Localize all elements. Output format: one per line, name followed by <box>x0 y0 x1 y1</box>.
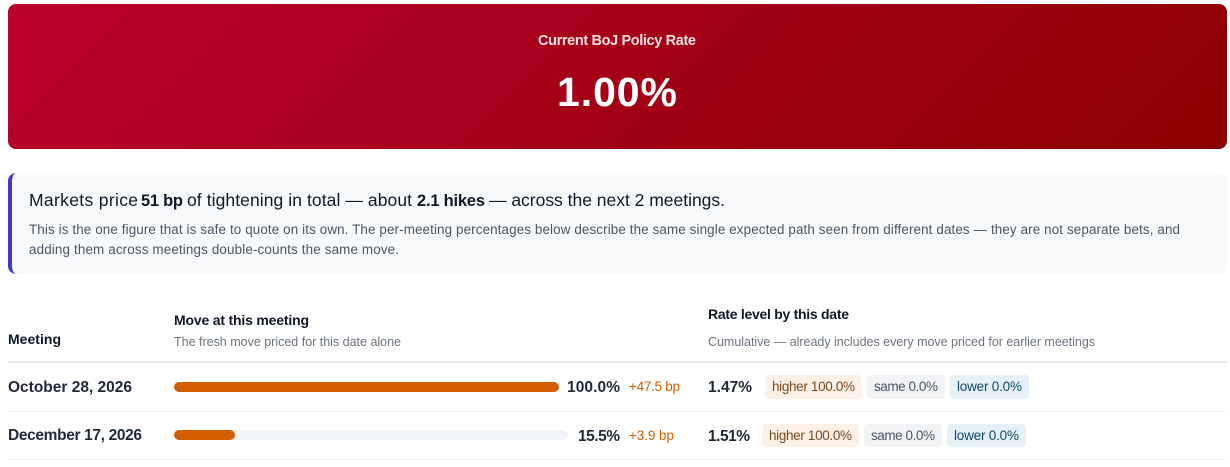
move probability: 15.5% <box>578 428 620 445</box>
callout headline: Markets price <box>29 190 138 210</box>
pill: lower <box>950 375 1029 399</box>
table row: October 28, 2026 <box>8 375 1029 399</box>
callout headline: of tightening in total — about <box>187 190 412 210</box>
table row: December 17, 2026 <box>8 424 1026 447</box>
move size: +47.5 bp <box>629 379 680 394</box>
column heading: rate level by this date <box>708 306 1095 349</box>
pill: lower: lower 0.0% <box>957 379 1022 394</box>
callout explanatory text: adding them across meetings double-counts the same move. <box>29 242 399 257</box>
column heading: move at this meeting: The fresh move priced for this date alone <box>174 335 401 349</box>
pill: same: same 0.0% <box>874 379 938 394</box>
pill: lower <box>947 424 1026 447</box>
hero label: Current BoJ Policy Rate <box>538 33 696 49</box>
move size: +3.9 bp <box>629 428 674 443</box>
callout headline: 51 bp <box>141 192 183 210</box>
callout explanatory text: This is the one figure that is safe to quote on its own. The per-meeting percentages below describe the same single expected path seen from different dates — they are not separate bets, and <box>29 222 1180 237</box>
pill: higher: higher 100.0% <box>772 379 855 394</box>
panel: current policy rate hero <box>8 4 1227 149</box>
callout headline <box>29 190 725 210</box>
callout explanatory text <box>29 222 1180 257</box>
pill: higher: higher 100.0% <box>769 428 852 443</box>
column heading: meeting: Meeting <box>8 331 61 347</box>
column heading: rate level by this date: Cumulative — already includes every move priced for earlier meetings <box>708 335 1095 349</box>
probability bar <box>174 430 568 440</box>
table header <box>8 306 1095 349</box>
probability bar <box>174 382 559 392</box>
cumulative rate: 1.51% <box>708 428 750 445</box>
cumulative rate: 1.47% <box>708 379 752 396</box>
pill: higher <box>765 375 862 399</box>
column heading: move at this meeting: Move at this meeting <box>174 312 309 328</box>
callout headline: — across the next 2 meetings. <box>489 190 725 210</box>
callout headline: 2.1 hikes <box>417 192 485 210</box>
pill: same: same 0.0% <box>871 428 935 443</box>
column heading: move at this meeting <box>174 312 401 349</box>
hero value: 1.00% <box>557 69 677 115</box>
move probability: 100.0% <box>567 379 620 396</box>
pill: higher <box>762 424 859 447</box>
pill: same <box>867 375 945 399</box>
meeting date: December 17, 2026 <box>8 427 142 444</box>
pill: same <box>864 424 942 447</box>
meeting date: October 28, 2026 <box>8 379 132 396</box>
pill: lower: lower 0.0% <box>954 428 1019 443</box>
column heading: rate level by this date: Rate level by this date <box>708 306 849 322</box>
panel: market pricing summary callout <box>8 173 1227 274</box>
